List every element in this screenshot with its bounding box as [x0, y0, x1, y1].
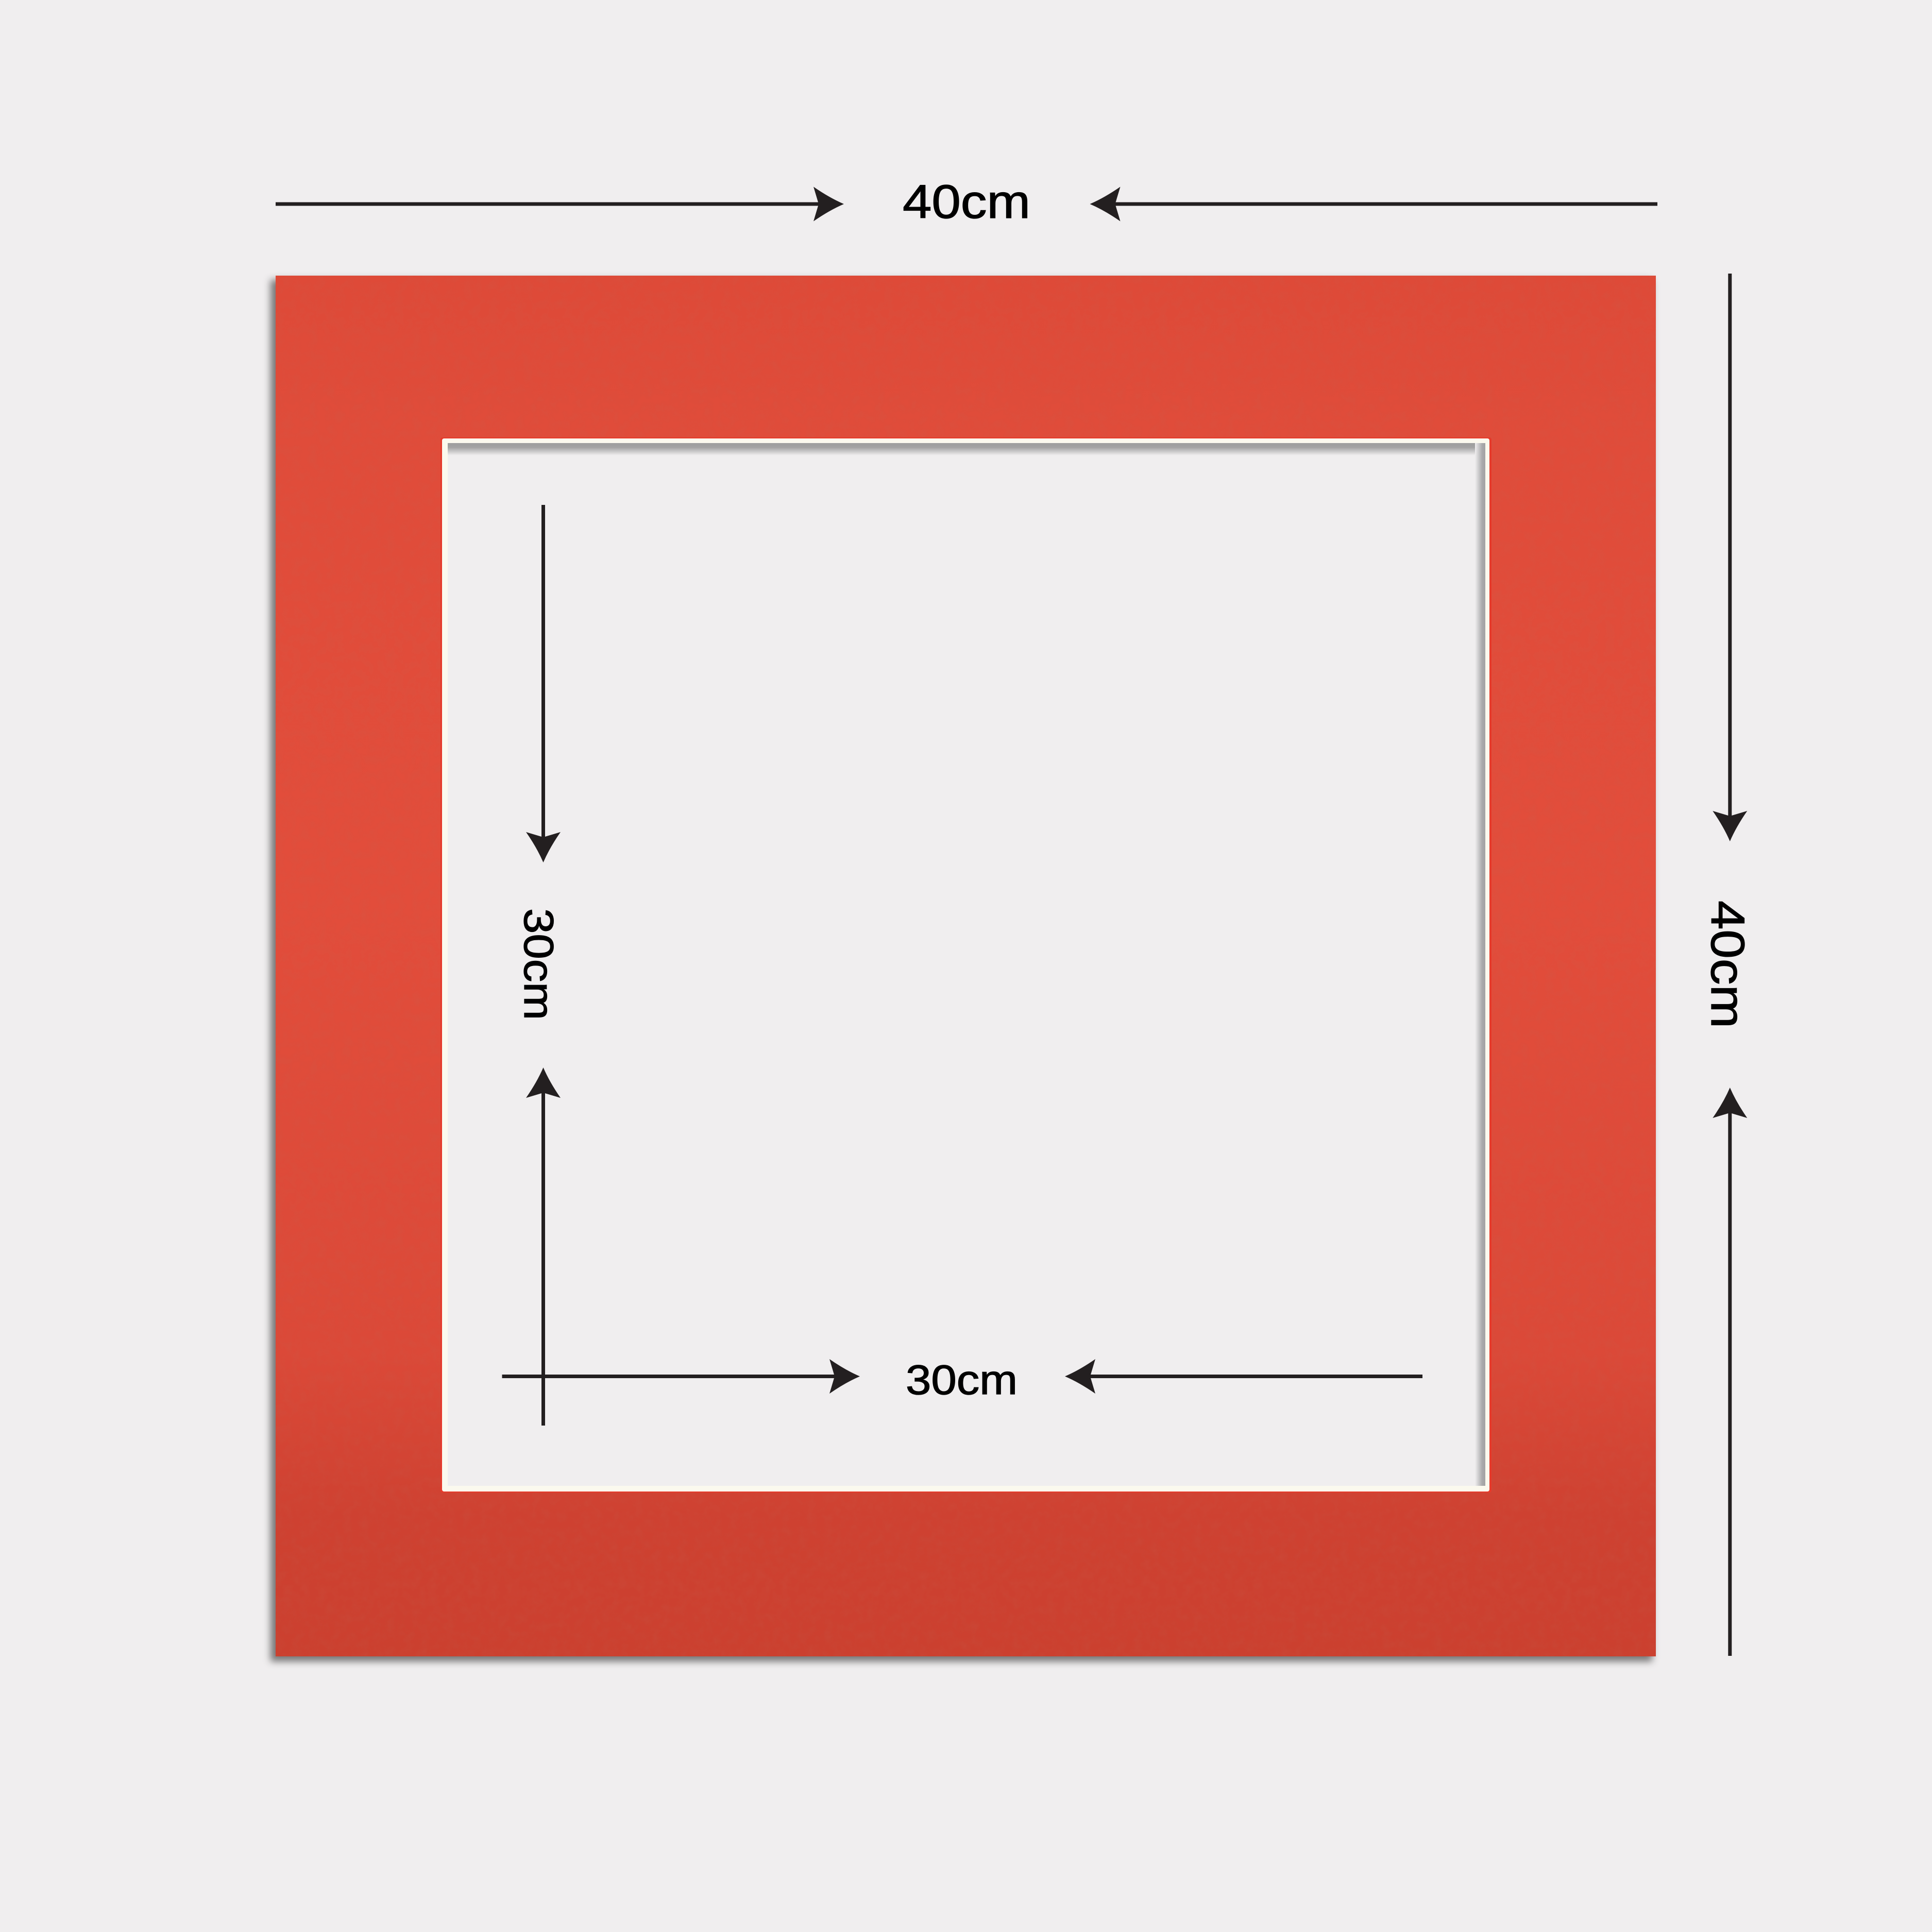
- arrow: top left pointing right: [276, 187, 844, 222]
- window opening: [448, 443, 1485, 1486]
- arrow: inner left pointing down: [526, 505, 561, 862]
- arrow: right side pointing down: [1713, 274, 1747, 841]
- arrow: inner left pointing up: [526, 1067, 561, 1426]
- left inner dimension: 30cm height: [515, 505, 562, 1426]
- label: 30cm: 30cm: [906, 1357, 1018, 1403]
- window right inner shadow: [1475, 443, 1485, 1486]
- panel: red mount board: [270, 276, 1656, 1662]
- white bevel: [442, 438, 1489, 1492]
- arrow: inner bottom pointing right: [502, 1359, 860, 1394]
- label: 40cm rotated: 40cm: [1701, 901, 1754, 1028]
- bottom inner dimension: 30cm width: [502, 1357, 1422, 1403]
- board surface: [276, 276, 1656, 1656]
- board drop shadow: [270, 280, 1652, 1662]
- label: 40cm: 40cm: [903, 176, 1030, 228]
- arrow: top right pointing left: [1090, 187, 1657, 222]
- top dimension: 40cm width: [276, 176, 1657, 228]
- board paper texture: [276, 276, 1656, 1656]
- arrow: right side pointing up: [1713, 1088, 1747, 1656]
- arrow: inner bottom pointing left: [1065, 1359, 1422, 1394]
- window cut edge: [440, 437, 1492, 1493]
- window top inner shadow: [448, 443, 1485, 455]
- label: 30cm rotated: 30cm: [515, 908, 562, 1020]
- right dimension: 40cm height: [1701, 274, 1754, 1656]
